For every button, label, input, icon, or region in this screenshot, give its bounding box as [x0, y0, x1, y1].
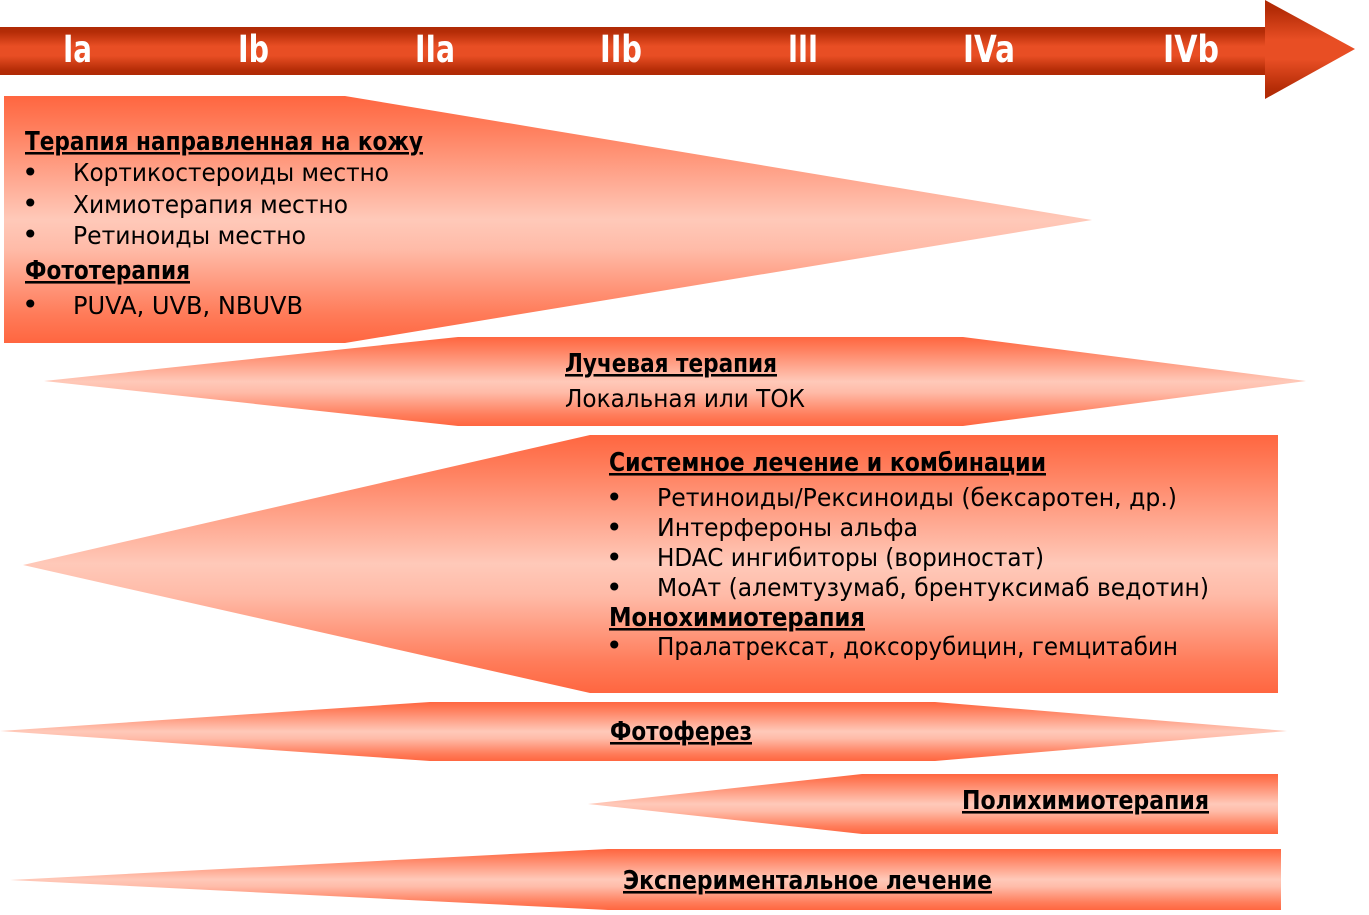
text: systemic treatment: •: [606, 629, 623, 662]
text: skin-directed therapy: •: [22, 218, 39, 251]
stage labels: Ia: [63, 28, 92, 71]
shape: experimental treatment: [10, 849, 1281, 910]
stage labels: IIb: [600, 28, 642, 71]
text: skin-directed therapy: Терапия направленная на кожу: [25, 127, 423, 157]
text: systemic treatment: HDAC ингибиторы (вориностат): [657, 543, 1044, 572]
shape: photopheresis: [0, 702, 1287, 761]
text: systemic treatment: [606, 448, 1209, 662]
stage labels: IVb: [1163, 28, 1219, 71]
text: photopheresis: Фотоферез: [610, 717, 752, 747]
text: skin-directed therapy: •: [22, 156, 39, 189]
panel: polychemotherapy: [588, 774, 1278, 834]
text: systemic treatment: •: [606, 571, 623, 604]
stage labels: IIa: [415, 28, 455, 71]
stage labels: Ib: [238, 28, 269, 71]
text: skin-directed therapy: Ретиноиды местно: [73, 221, 306, 250]
stage labels: III: [788, 28, 818, 71]
text: skin-directed therapy: •: [22, 288, 39, 321]
shape: polychemotherapy: [588, 774, 1278, 834]
text: systemic treatment: Интерфероны альфа: [657, 513, 918, 542]
panel: skin-directed therapy: [4, 96, 1092, 343]
stage labels: IVa: [963, 28, 1015, 71]
shape: skin-directed therapy: [4, 96, 1092, 343]
text: systemic treatment: Ретиноиды/Рексиноиды (бексаротен, др.): [657, 483, 1177, 512]
text: skin-directed therapy: Фототерапия: [25, 256, 190, 286]
stage labels: [63, 28, 1219, 71]
text: systemic treatment: •: [606, 541, 623, 574]
text: skin-directed therapy: PUVA, UVB, NBUVB: [73, 291, 303, 320]
text: systemic treatment: МоАт (алемтузумаб, брентуксимаб ведотин): [657, 573, 1209, 602]
text: systemic treatment: Пралатрексат, доксорубицин, гемцитабин: [657, 632, 1178, 661]
text: polychemotherapy: Полихимиотерапия: [962, 786, 1209, 816]
text: radiation therapy: [565, 349, 805, 413]
text: radiation therapy: Лучевая терапия: [565, 349, 777, 379]
text: systemic treatment: Системное лечение и комбинации: [609, 448, 1046, 478]
text: experimental treatment: Экспериментальное лечение: [623, 866, 992, 896]
text: skin-directed therapy: Химиотерапия местно: [73, 190, 348, 219]
panel: radiation therapy: [44, 337, 1306, 426]
text: systemic treatment: Монохимиотерапия: [609, 603, 865, 633]
shape: systemic treatment: [23, 435, 1278, 693]
text: skin-directed therapy: [22, 127, 423, 321]
stage arrow: [0, 0, 1355, 99]
text: skin-directed therapy: •: [22, 187, 39, 220]
text: radiation therapy: Локальная или ТОК: [565, 384, 805, 413]
text: systemic treatment: •: [606, 511, 623, 544]
panel: experimental treatment: [10, 849, 1281, 910]
arrow shaft: [0, 27, 1265, 75]
shape: radiation therapy: [44, 337, 1306, 426]
text: systemic treatment: •: [606, 481, 623, 514]
arrow head: [1265, 0, 1355, 99]
panel: photopheresis: [0, 702, 1287, 761]
panel: systemic treatment: [23, 435, 1278, 693]
text: skin-directed therapy: Кортикостероиды местно: [73, 158, 389, 187]
